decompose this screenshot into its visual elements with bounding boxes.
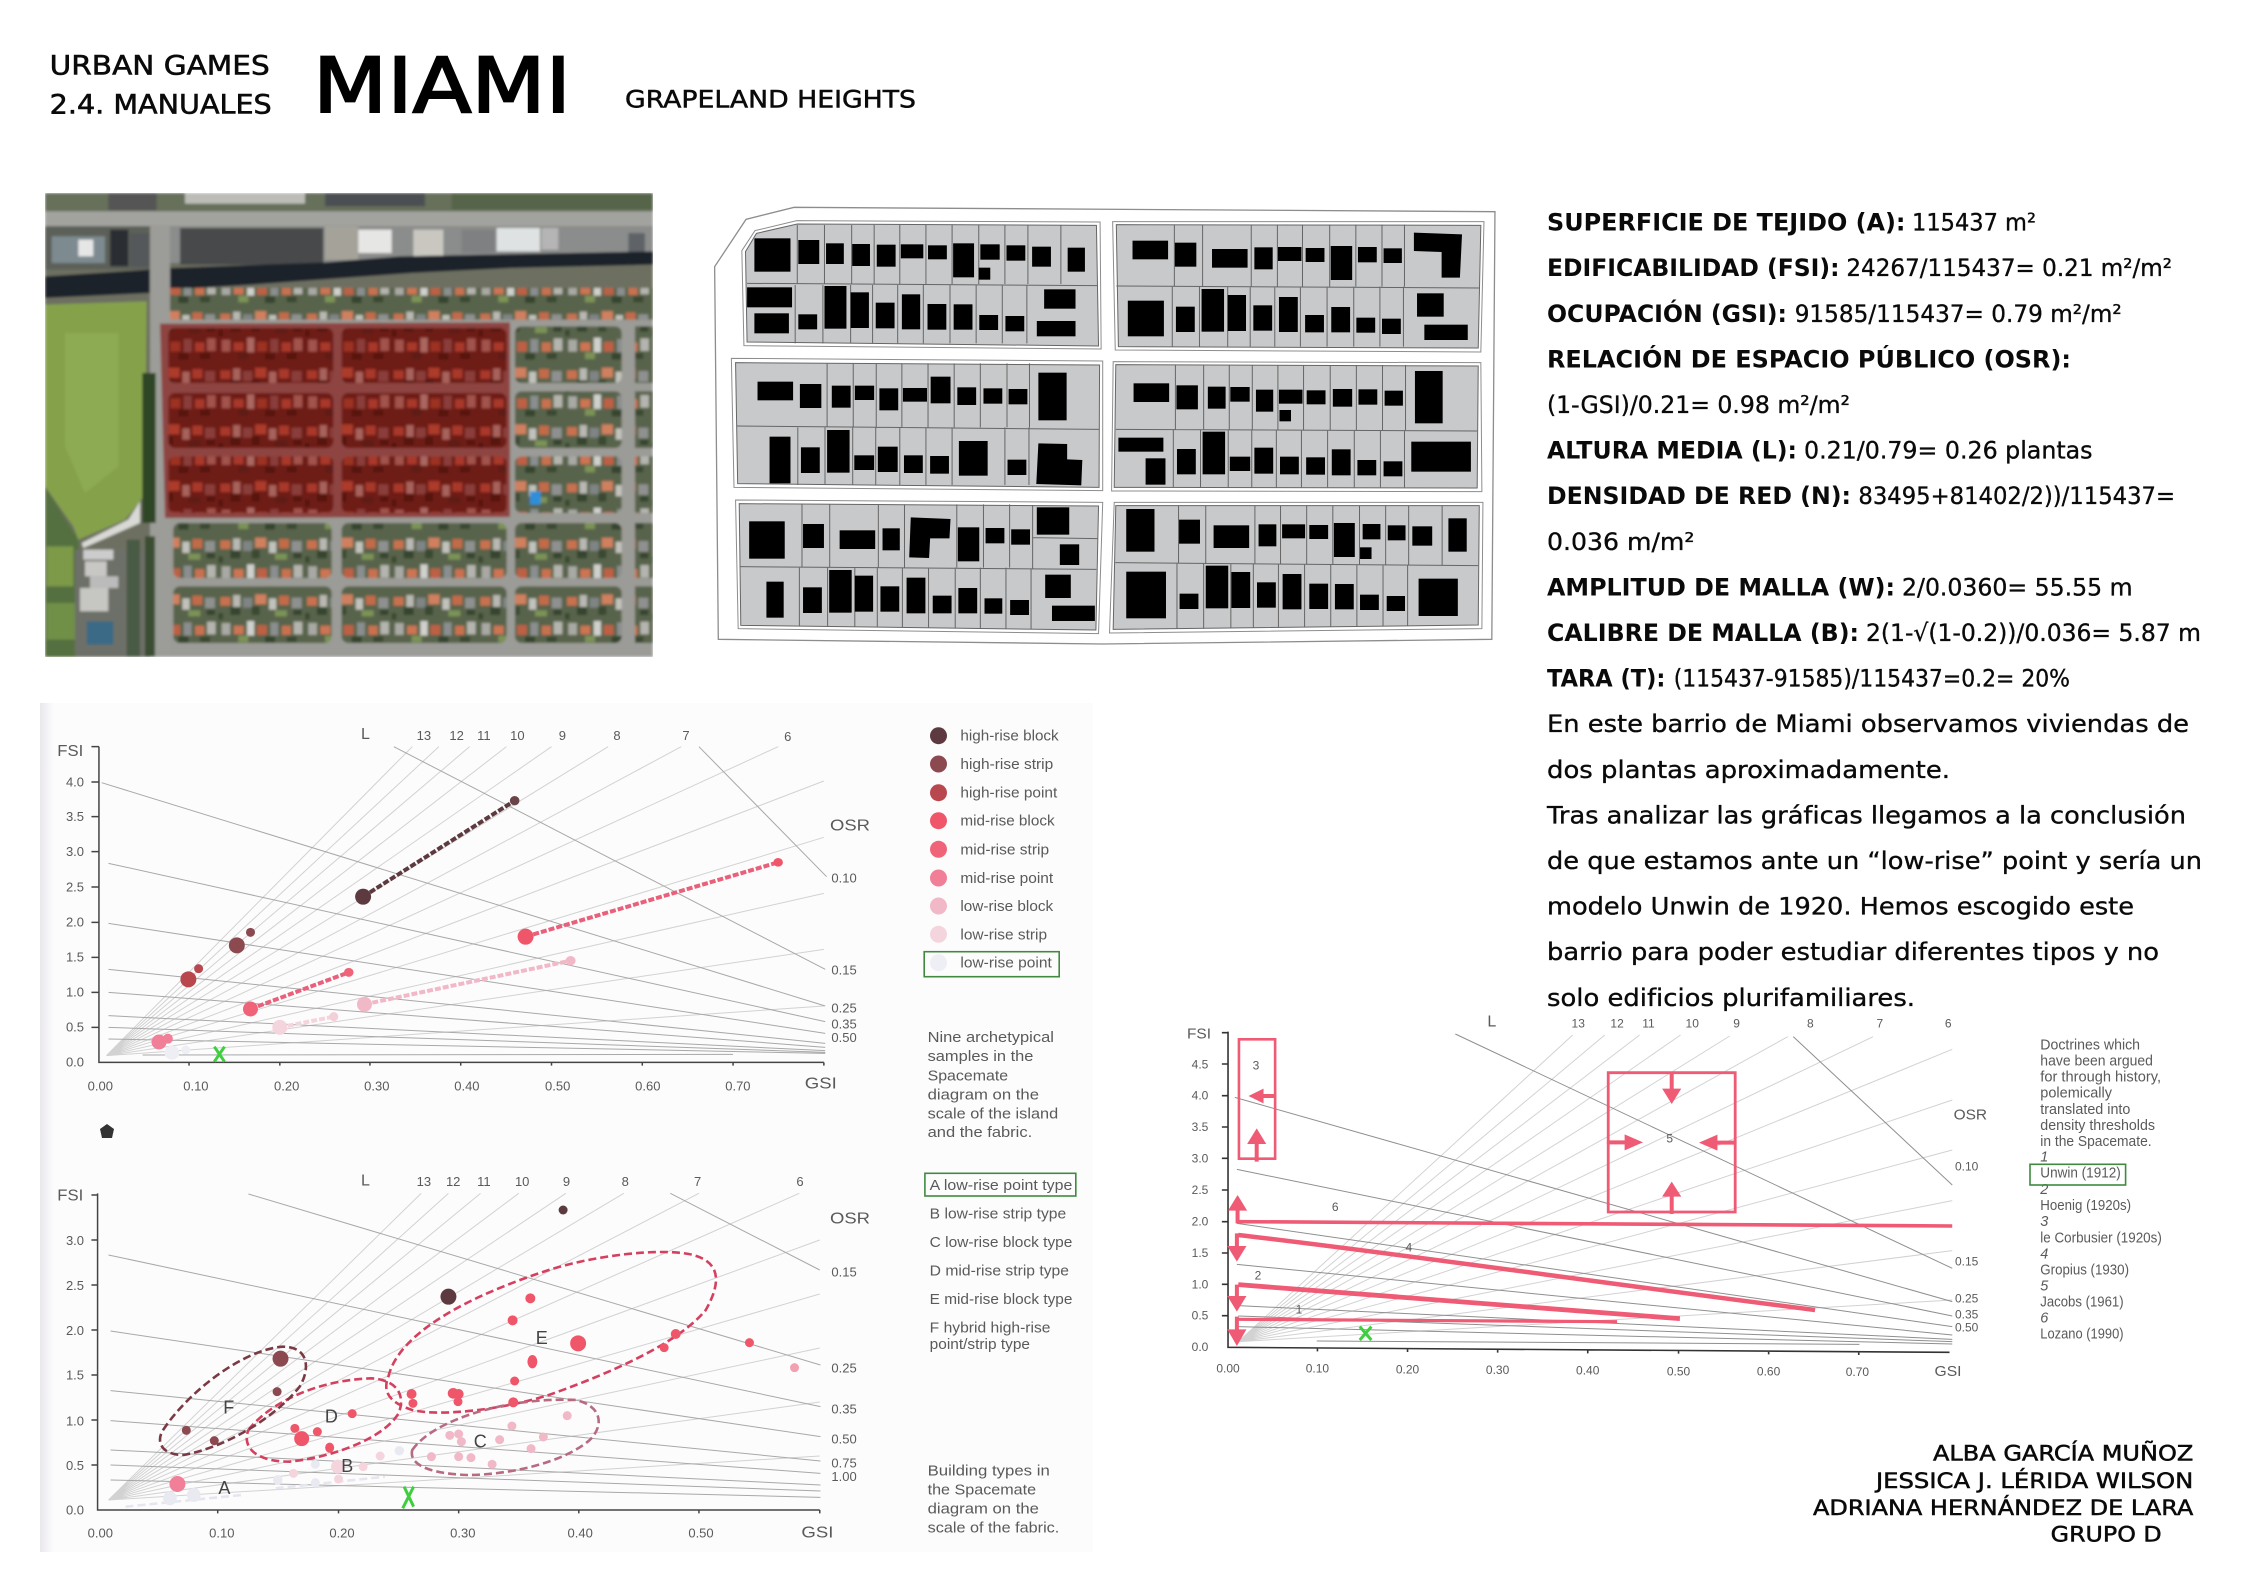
axis labels: 0.10 — [183, 1079, 209, 1094]
axis labels: 2.5 — [1192, 1183, 1209, 1197]
text block: indicators and conclusions: EDIFICABILIDAD (FSI): — [1547, 254, 1840, 282]
axis labels: OSR — [830, 818, 870, 835]
text block: indicators and conclusions: dos plantas aproximadamente. — [1547, 756, 1950, 784]
doctrine lines 1, 2, 4, 6 — [1238, 1222, 1952, 1322]
axis labels: 0.00 — [88, 1079, 113, 1094]
axis labels: 0.50 — [831, 1030, 857, 1045]
axis labels: 12 — [446, 1174, 460, 1189]
axis labels: 0.10 — [1955, 1160, 1979, 1174]
axis labels: 3.5 — [1192, 1120, 1209, 1134]
axis labels: 0.30 — [364, 1079, 389, 1094]
block 3 — [731, 358, 1103, 491]
axis labels: FSI — [57, 743, 83, 760]
axis labels: 0.35 — [831, 1017, 857, 1032]
axis labels: 1.5 — [1192, 1246, 1209, 1260]
axis labels: 1.00 — [831, 1469, 857, 1484]
axis labels: 2.5 — [66, 1278, 84, 1293]
authors: JESSICA J. LÉRIDA WILSON — [1874, 1468, 2193, 1493]
block 6 — [1110, 502, 1483, 633]
axis labels: 2.0 — [1192, 1214, 1209, 1228]
axis labels: 6 — [1332, 1200, 1339, 1214]
axis labels: 0.5 — [66, 1458, 84, 1473]
plot lines and points — [91, 747, 827, 1066]
legend: doctrines: Gropius (1930) — [2040, 1262, 2129, 1278]
text block: indicators and conclusions: CALIBRE DE MALLA (B): — [1547, 619, 1859, 647]
legend: doctrines: Unwin (1912) — [2040, 1166, 2121, 1182]
axis labels: 0.00 — [1216, 1362, 1240, 1376]
caption: nine archetypical samples — [928, 1030, 1058, 1141]
legend: doctrines: polemically — [2040, 1086, 2113, 1102]
axis labels: 0.15 — [1955, 1254, 1979, 1268]
axis labels: 0.25 — [1955, 1292, 1979, 1306]
axis labels: 0.50 — [831, 1432, 857, 1447]
axis labels: 4.5 — [1192, 1057, 1209, 1071]
axis labels: 0.10 — [209, 1525, 234, 1540]
axis labels — [57, 1173, 870, 1541]
legend: nine archetypes: low-rise point — [960, 956, 1052, 972]
caption: building types: diagram on the — [928, 1502, 1039, 1518]
title block: course and section — [50, 51, 272, 121]
legend: doctrines: have been argued — [2040, 1054, 2153, 1070]
text block: indicators and conclusions: 115437 m² — [1912, 209, 2036, 237]
type letters: A — [218, 1478, 230, 1498]
axis labels: 8 — [1807, 1016, 1814, 1030]
axis labels: 1.0 — [66, 985, 84, 1000]
axis labels: OSR — [1954, 1106, 1987, 1123]
legend: doctrines: le Corbusier (1920s) — [2040, 1230, 2162, 1246]
legend: nine archetypes: low-rise strip — [960, 927, 1047, 943]
text block: indicators and conclusions: (115437-91585)/115437=0.2= 20% — [1674, 665, 2070, 693]
text block: indicators and conclusions: RELACIÓN DE ESPACIO PÚBLICO (OSR): — [1547, 343, 2071, 373]
text block: indicators and conclusions: modelo Unwin de 1920. Hemos escogido este — [1547, 893, 2134, 921]
text block: indicators and conclusions: SUPERFICIE DE TEJIDO (A): — [1547, 209, 1906, 237]
text block: indicators and conclusions: 91585/115437= 0.79 m²/m² — [1795, 300, 2122, 328]
data points — [163, 1205, 799, 1505]
axis labels: 8 — [613, 728, 621, 743]
axis labels: 1.5 — [66, 950, 84, 965]
axis labels: 2 — [1255, 1268, 1262, 1282]
axis labels: 0.70 — [725, 1079, 751, 1094]
legend: doctrines: translated into — [2040, 1102, 2130, 1118]
title: MIAMI: MIAMI — [313, 41, 571, 130]
axis labels: 0.10 — [1306, 1362, 1329, 1376]
legend: building types: F hybrid high-rise — [930, 1320, 1050, 1336]
axis labels: 10 — [510, 728, 525, 743]
legend: nine archetypes: high-rise point — [960, 786, 1057, 802]
text block: indicators and conclusions: AMPLITUD DE MALLA (W): — [1547, 573, 1895, 601]
axis labels: 5 — [1666, 1131, 1673, 1145]
chart 3: density doctrines — [1187, 1014, 2162, 1380]
axis labels: 0.10 — [831, 870, 857, 885]
axis labels: 0.50 — [1955, 1321, 1979, 1335]
pool — [530, 491, 541, 505]
aerial photo with highlighted fabric — [45, 193, 653, 657]
legend: nine archetypes: mid-rise block — [960, 814, 1055, 830]
outline of the fabric — [715, 207, 1495, 644]
axis labels: FSI — [1187, 1025, 1211, 1042]
axis labels: 1.5 — [66, 1367, 84, 1382]
block 5 — [736, 500, 1103, 634]
axis labels: 0.0 — [66, 1502, 84, 1517]
axis labels: 2.0 — [66, 915, 84, 930]
legend: nine archetypes — [924, 727, 1059, 977]
axis labels: 0.25 — [831, 1360, 857, 1375]
doctrine 3 rectangle — [1239, 1039, 1275, 1159]
axis labels: 0.0 — [66, 1055, 84, 1070]
scanned page background for the left charts — [40, 703, 1093, 1552]
text block: indicators and conclusions: (1-GSI)/0.21= 0.98 m²/m² — [1547, 391, 1850, 419]
red highlighted study area — [160, 322, 510, 518]
legend: doctrines: Hoenig (1920s) — [2040, 1198, 2131, 1214]
text block: indicators and conclusions: ALTURA MEDIA (L): — [1547, 437, 1797, 465]
legend: building types: point/strip type — [930, 1337, 1030, 1353]
axis labels: 0.5 — [1192, 1309, 1209, 1323]
text block: indicators and conclusions: 0.21/0.79= 0.26 plantas — [1804, 437, 2092, 465]
axis labels: 6 — [796, 1174, 804, 1189]
subtitle: neighbourhood: GRAPELAND HEIGHTS — [625, 86, 916, 114]
caption: nine archetypical samples: Nine archetypical — [928, 1030, 1054, 1046]
legend: nine archetypes: low-rise block — [960, 899, 1054, 915]
type letters: B — [341, 1456, 353, 1476]
axis labels: 6 — [1945, 1016, 1952, 1030]
axis labels: 0.35 — [1955, 1307, 1979, 1321]
legend: doctrines: Jacobs (1961) — [2040, 1295, 2124, 1311]
legend: building types: A low-rise point type — [930, 1178, 1072, 1194]
caption: nine archetypical samples: scale of the island — [928, 1106, 1058, 1122]
axis labels: L — [1487, 1014, 1496, 1031]
axis labels: 11 — [477, 728, 491, 743]
text block: indicators and conclusions: 0.036 m/m² — [1547, 528, 1694, 556]
axis labels: 0.60 — [635, 1079, 660, 1094]
axis labels: 9 — [1733, 1016, 1740, 1030]
legend: doctrines — [2030, 1037, 2162, 1343]
axis labels: 3.0 — [66, 1233, 84, 1248]
block 1 — [742, 221, 1101, 349]
canal — [45, 251, 653, 298]
axis labels: L — [361, 726, 370, 743]
axis labels: 0.35 — [831, 1401, 857, 1416]
title block: course and section: 2.4. MANUALES — [50, 90, 272, 121]
axis labels: 9 — [559, 728, 566, 743]
green cross marker — [214, 1047, 225, 1062]
text block: indicators and conclusions: 24267/115437= 0.21 m²/m² — [1846, 254, 2172, 282]
axis labels: 0.25 — [831, 1000, 857, 1015]
axis labels: 0.00 — [88, 1525, 113, 1540]
axis labels: 6 — [784, 729, 791, 744]
authors: ALBA GARCÍA MUÑOZ — [1933, 1440, 2193, 1466]
legend: doctrines: in the Spacemate. — [2040, 1134, 2152, 1150]
axis labels: OSR — [830, 1210, 870, 1227]
axis labels: FSI — [57, 1188, 83, 1205]
caption: nine archetypical samples: Spacemate — [928, 1068, 1008, 1084]
legend: doctrines: density thresholds — [2040, 1118, 2155, 1134]
type letters: F — [223, 1397, 234, 1417]
axis labels: 2.5 — [66, 879, 84, 894]
text block: indicators and conclusions: Tras analizar las gráficas llegamos a la conclusión — [1546, 801, 2186, 829]
axis labels: 13 — [1572, 1016, 1585, 1030]
plot lines, doctrines and arrows — [1222, 1032, 1952, 1355]
axis labels: 10 — [1686, 1016, 1699, 1030]
text block: indicators and conclusions: DENSIDAD DE RED (N): — [1547, 482, 1851, 510]
axis labels: 3.5 — [66, 809, 84, 824]
axis labels: 0.30 — [1486, 1363, 1510, 1377]
axis labels: 0.50 — [545, 1079, 570, 1094]
icon: page number pentagon — [100, 1124, 114, 1138]
caption: nine archetypical samples: and the fabric. — [928, 1125, 1032, 1141]
text block: indicators and conclusions: solo edificios plurifamiliares. — [1547, 984, 1915, 1012]
authors: GRUPO D — [2051, 1523, 2162, 1547]
axis labels: 0.40 — [568, 1525, 593, 1540]
green cross marker — [1360, 1327, 1371, 1340]
type letters: D — [325, 1407, 338, 1427]
legend: doctrines: Lozano (1990) — [2040, 1327, 2124, 1343]
axis labels: 0.40 — [1576, 1364, 1600, 1378]
axis labels — [1187, 1014, 1987, 1380]
axis labels: 0.70 — [1846, 1365, 1869, 1379]
axis labels: 2.0 — [66, 1323, 84, 1338]
axis labels: 11 — [477, 1174, 491, 1189]
legend: doctrines: Doctrines which — [2040, 1037, 2140, 1053]
axis labels: 1.0 — [1192, 1277, 1209, 1291]
axis labels: 3.0 — [1192, 1151, 1209, 1165]
caption: nine archetypical samples: diagram on the — [928, 1087, 1039, 1103]
axis labels: 0.40 — [454, 1079, 480, 1094]
axis labels: 0.20 — [274, 1079, 299, 1094]
legend: building types: E mid-rise block type — [930, 1292, 1072, 1308]
legend: nine archetypes: mid-rise point — [960, 871, 1053, 887]
axis labels: 3 — [1253, 1058, 1260, 1072]
legend: doctrines: for through history, — [2040, 1070, 2161, 1086]
legend: doctrines: 4 — [2040, 1246, 2048, 1262]
axis labels: GSI — [1934, 1363, 1962, 1380]
authors — [1813, 1440, 2194, 1547]
axis labels — [57, 726, 870, 1094]
text block: indicators and conclusions: barrio para poder estudiar diferentes tipos y no — [1547, 938, 2159, 966]
block 4 — [1112, 362, 1482, 492]
axis labels: 13 — [417, 728, 431, 743]
legend: doctrines: 6 — [2040, 1311, 2049, 1327]
caption: nine archetypical samples: samples in the — [928, 1049, 1033, 1065]
axis labels: 0.75 — [831, 1456, 857, 1471]
text block: indicators and conclusions: OCUPACIÓN (GSI): — [1547, 298, 1787, 328]
axis labels: 13 — [417, 1174, 431, 1189]
site plan of the six blocks — [715, 207, 1495, 644]
axis labels: 4.0 — [66, 774, 84, 789]
type letters: C — [474, 1431, 487, 1451]
text block: indicators and conclusions: TARA (T): — [1547, 665, 1665, 693]
legend: doctrines: 2 — [2039, 1182, 2048, 1198]
axis labels: 0.15 — [831, 1265, 857, 1280]
axis labels: 1.0 — [66, 1413, 84, 1428]
type letters: E — [536, 1328, 548, 1348]
legend: building types: D mid-rise strip type — [930, 1263, 1069, 1279]
axis labels: 10 — [515, 1174, 529, 1189]
data points — [152, 796, 783, 1060]
axis labels: 12 — [449, 728, 464, 743]
legend: doctrines: 1 — [2040, 1150, 2048, 1166]
caption: building types — [928, 1464, 1059, 1536]
axis labels: 0.5 — [66, 1020, 84, 1035]
caption: building types: Building types in — [928, 1464, 1050, 1480]
axis labels: 0.50 — [688, 1525, 714, 1540]
arrows — [1227, 1072, 1737, 1346]
housing strip along the canal — [170, 288, 653, 320]
caption: building types: scale of the fabric. — [928, 1520, 1059, 1536]
axis labels: 12 — [1610, 1016, 1624, 1030]
tree line beside the road — [142, 373, 156, 656]
axis labels: 3.0 — [66, 844, 84, 859]
axis labels: 0.60 — [1757, 1365, 1781, 1379]
text block: indicators and conclusions: 83495+81402/2))/115437= — [1858, 482, 2175, 510]
legend: doctrines: 3 — [2040, 1214, 2048, 1230]
axis labels: 11 — [1642, 1016, 1655, 1030]
axis labels: 0.0 — [1192, 1340, 1209, 1354]
text block: indicators and conclusions — [1546, 209, 2202, 1012]
plot lines and points — [91, 1193, 820, 1513]
legend: nine archetypes: high-rise strip — [960, 757, 1053, 773]
axis labels: GSI — [801, 1524, 833, 1541]
legend: nine archetypes: high-rise block — [960, 729, 1059, 745]
axis labels: 4.0 — [1192, 1088, 1209, 1102]
axis labels: 4 — [1406, 1241, 1413, 1255]
doctrine 5 rectangle — [1608, 1073, 1735, 1212]
axis labels: 7 — [1877, 1016, 1884, 1030]
natural-colour blocks — [173, 326, 653, 643]
axis labels: 7 — [694, 1174, 701, 1189]
vertical road — [150, 226, 170, 657]
text block: indicators and conclusions: En este barrio de Miami observamos viviendas de — [1547, 710, 2189, 738]
axis labels: 0.30 — [450, 1525, 475, 1540]
type letters — [218, 1328, 548, 1498]
axis labels: 0.20 — [329, 1525, 355, 1540]
text block: indicators and conclusions: 2(1-√(1-0.2))/0.036= 5.87 m — [1866, 619, 2201, 647]
axis labels: 7 — [682, 728, 690, 743]
axis labels: 0.15 — [831, 963, 857, 978]
legend: nine archetypes: mid-rise strip — [960, 842, 1049, 858]
legend: building types: C low-rise block type — [930, 1235, 1072, 1251]
legend: doctrines: 5 — [2040, 1279, 2049, 1295]
dashed type outlines — [126, 1252, 716, 1507]
axis labels: 1 — [1296, 1302, 1303, 1316]
block 2 — [1113, 222, 1484, 352]
chart 1: Spacemate archetypes — [57, 726, 1059, 1141]
axis labels: 0.20 — [1396, 1362, 1420, 1376]
chart 2: building types — [57, 1173, 1076, 1541]
axis labels: 8 — [622, 1174, 629, 1189]
legend: building types — [925, 1173, 1076, 1353]
caption: building types: the Spacemate — [928, 1483, 1036, 1499]
axis labels: L — [361, 1173, 370, 1190]
golf field — [45, 301, 152, 657]
legend: building types: B low-rise strip type — [930, 1206, 1066, 1222]
text block: indicators and conclusions: 2/0.0360= 55.55 m — [1902, 573, 2133, 601]
green cross marker — [403, 1487, 414, 1508]
dashed ranges — [250, 801, 778, 1027]
title block: course and section: URBAN GAMES — [50, 51, 270, 82]
axis labels: 9 — [563, 1174, 570, 1189]
axis labels: GSI — [805, 1075, 837, 1092]
authors: ADRIANA HERNÁNDEZ DE LARA — [1813, 1495, 2194, 1520]
axis labels: 0.50 — [1667, 1364, 1691, 1378]
text block: indicators and conclusions: de que estamos ante un “low-rise” point y sería un — [1547, 847, 2202, 875]
